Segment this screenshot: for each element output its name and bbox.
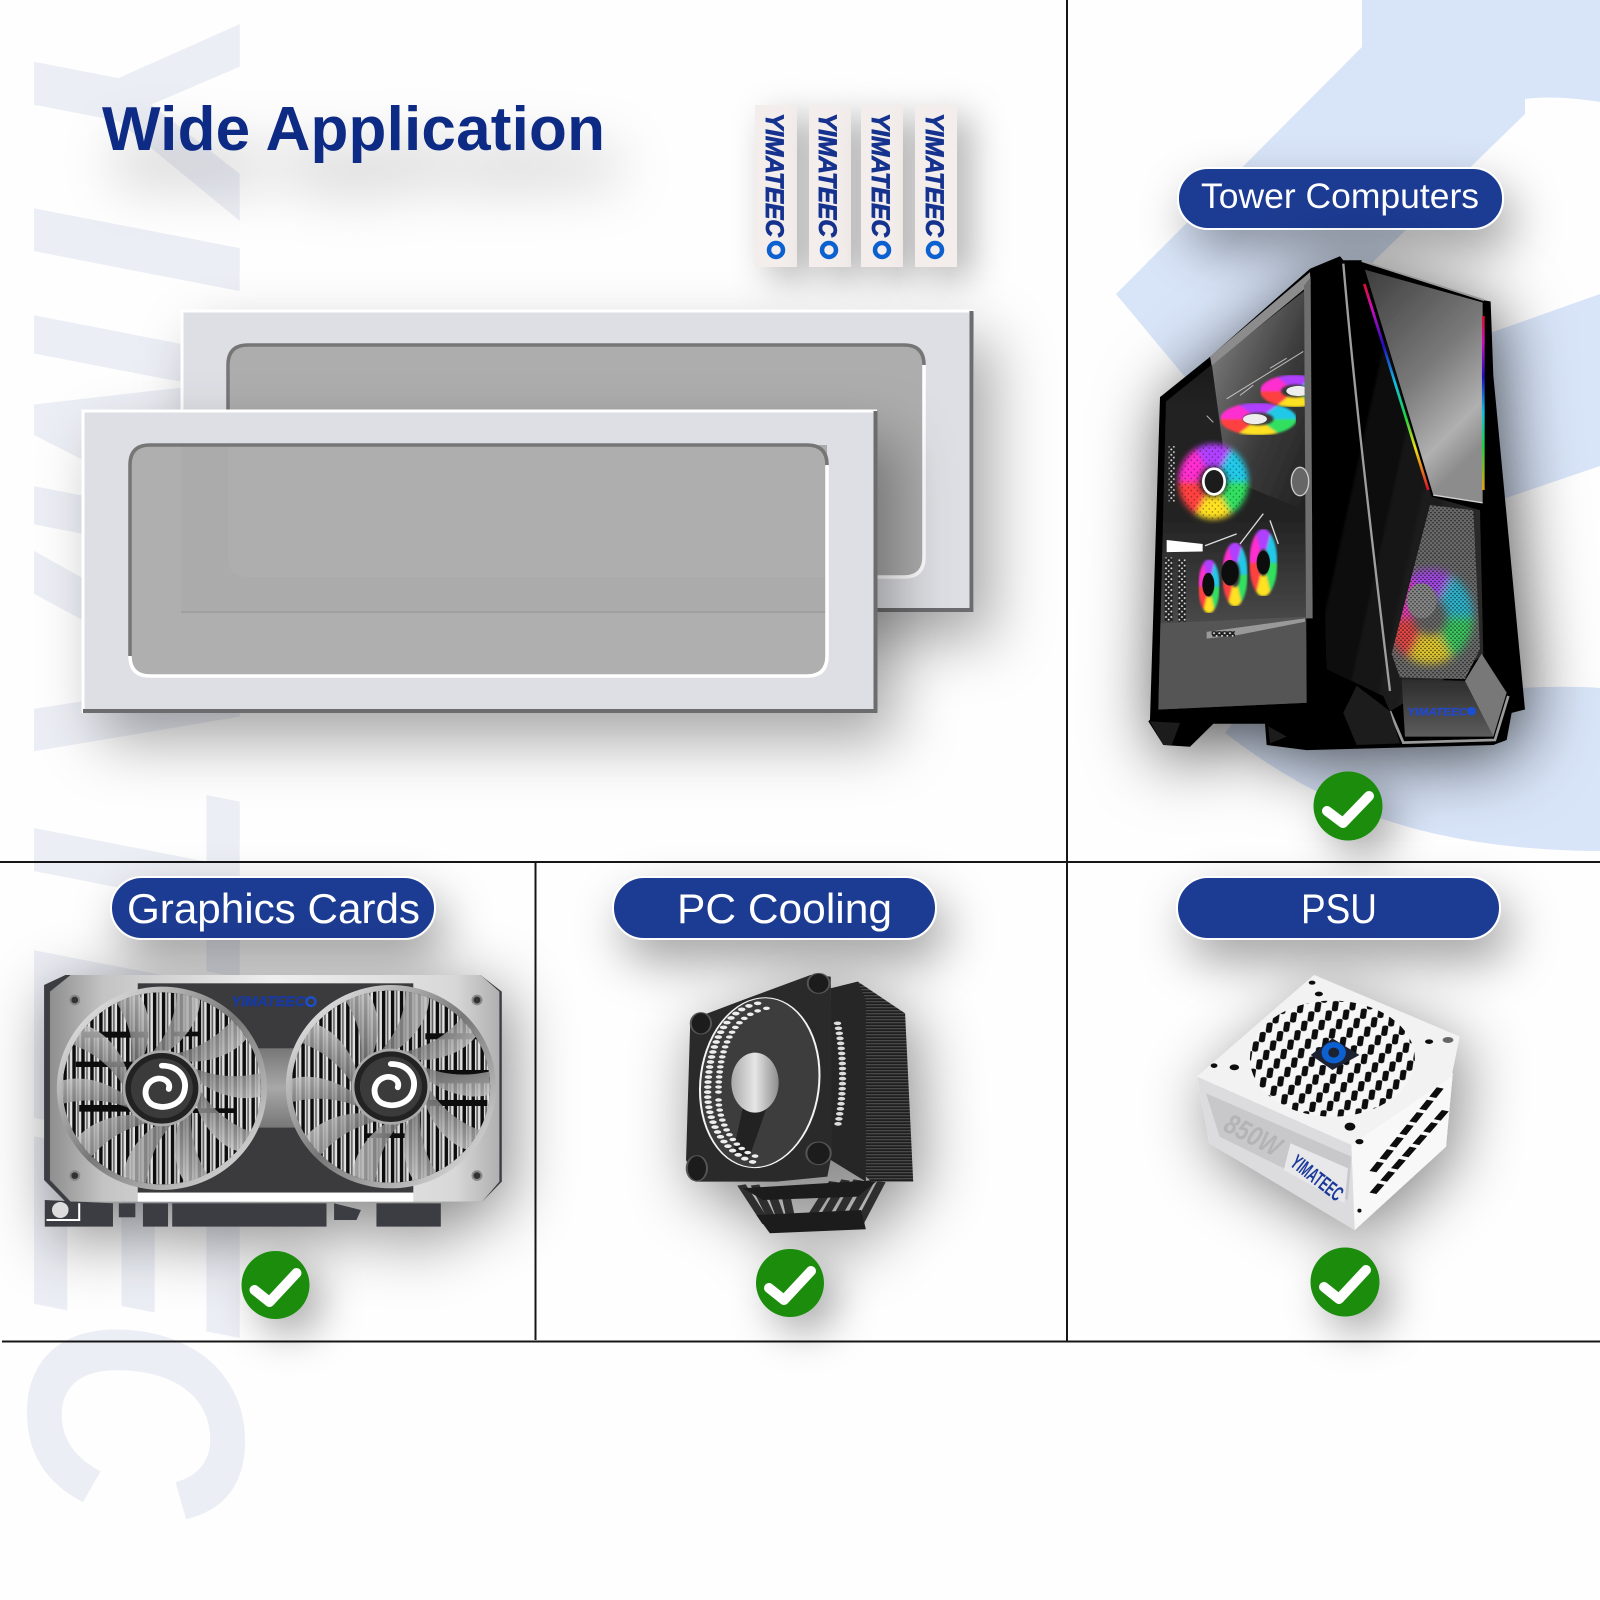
heat pipes and base [741, 1180, 881, 1227]
check mark: PC cooling [756, 1249, 824, 1317]
side glass panel [1158, 272, 1313, 710]
strip 3: YIMATEEC [866, 113, 894, 238]
case feet [1150, 686, 1400, 745]
case silhouette [1148, 256, 1525, 750]
bottom plate with logo [1390, 654, 1508, 743]
right fan [284, 985, 498, 1188]
background: light blue shapes in tower panel [1116, 0, 1600, 851]
pill: PSU: PSU [1301, 885, 1377, 932]
pill: Tower Computers [1178, 168, 1503, 229]
check mark: PSU [1310, 1248, 1380, 1316]
strip 2: YIMATEEC [813, 113, 841, 238]
centre panel with logo: YIMATEEC [231, 994, 306, 1010]
PSU faces [1197, 1077, 1355, 1230]
title: Wide Application [102, 95, 605, 164]
check mark: graphics cards [242, 1251, 310, 1319]
brand label strips [755, 105, 957, 267]
strip 1: YIMATEEC [760, 113, 788, 238]
PCI bracket and connector fingers [45, 1200, 441, 1227]
bracket mount hole [46, 1202, 79, 1220]
front mesh with RGB fan [1392, 505, 1480, 679]
pill: Graphics Cards: Graphics Cards [127, 885, 420, 932]
strip 3 [861, 105, 903, 267]
pill: PC Cooling: PC Cooling [677, 885, 892, 932]
screws [70, 996, 481, 1180]
dust filter frames [83, 311, 974, 713]
shroud plate [44, 975, 502, 1202]
pill: PSU [1177, 877, 1500, 939]
pill: Graphics Cards [111, 877, 435, 939]
back frame [182, 311, 974, 612]
pill: PC Cooling [613, 877, 936, 939]
pill: Tower Computers: Tower Computers [1201, 177, 1479, 216]
fan ring and hub [694, 997, 825, 1169]
centre panel with logo [138, 983, 413, 1202]
internal components [1165, 446, 1309, 639]
RGB fans inside the case [1178, 380, 1319, 605]
screws [1211, 981, 1453, 1213]
modular connector slots [1373, 1085, 1446, 1193]
wattage label: 850W [1219, 1108, 1289, 1164]
front fascia [1322, 261, 1484, 711]
check mark: tower [1314, 772, 1382, 840]
bottom plate with logo: YIMATEEC [1407, 707, 1468, 719]
fan frame [686, 975, 832, 1182]
left fan [55, 987, 269, 1190]
brand label: YIMATEEC [1286, 1151, 1347, 1206]
strip 4: YIMATEEC [920, 113, 948, 238]
illustration: graphics card [44, 975, 502, 1227]
front frame [83, 411, 877, 713]
strip 2 [809, 105, 851, 267]
heatsink fins [831, 982, 913, 1182]
fan grille [1250, 1001, 1415, 1117]
illustration: CPU cooler [686, 973, 913, 1233]
illustration: white power supply [1197, 975, 1459, 1230]
strip 4 [915, 105, 957, 267]
strip 1 [755, 105, 797, 267]
illustration: tower computer case [1148, 256, 1525, 750]
